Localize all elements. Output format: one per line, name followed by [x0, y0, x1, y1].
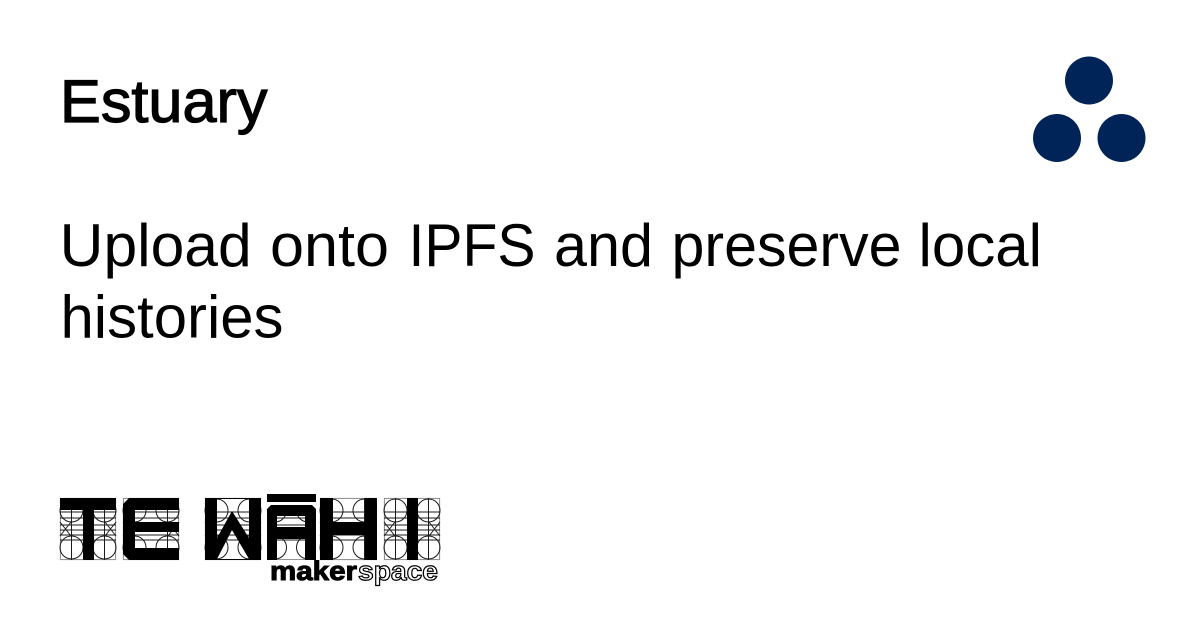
description text — [60, 212, 1042, 350]
description text: IPFS — [408, 212, 536, 279]
logo letter I — [384, 498, 440, 560]
makerspace wordmark: space — [358, 556, 438, 586]
logo letter E — [123, 498, 179, 560]
logo letter W — [205, 498, 261, 560]
description text: onto — [270, 212, 389, 279]
description text: local — [918, 212, 1042, 279]
description text: preserve — [672, 212, 902, 279]
logo: Te Wāhi makerspace — [60, 494, 440, 586]
icon: three navy circles logo — [1033, 56, 1146, 162]
logo letter A with macron — [267, 494, 316, 560]
makerspace wordmark — [270, 556, 438, 586]
makerspace wordmark: maker — [270, 556, 358, 586]
logo letter H — [320, 498, 377, 560]
title: Estuary: Estuary — [60, 68, 268, 135]
description text: histories — [60, 284, 284, 350]
description text: Upload — [60, 212, 252, 279]
logo letter T — [60, 498, 116, 560]
description text: and — [554, 212, 653, 279]
